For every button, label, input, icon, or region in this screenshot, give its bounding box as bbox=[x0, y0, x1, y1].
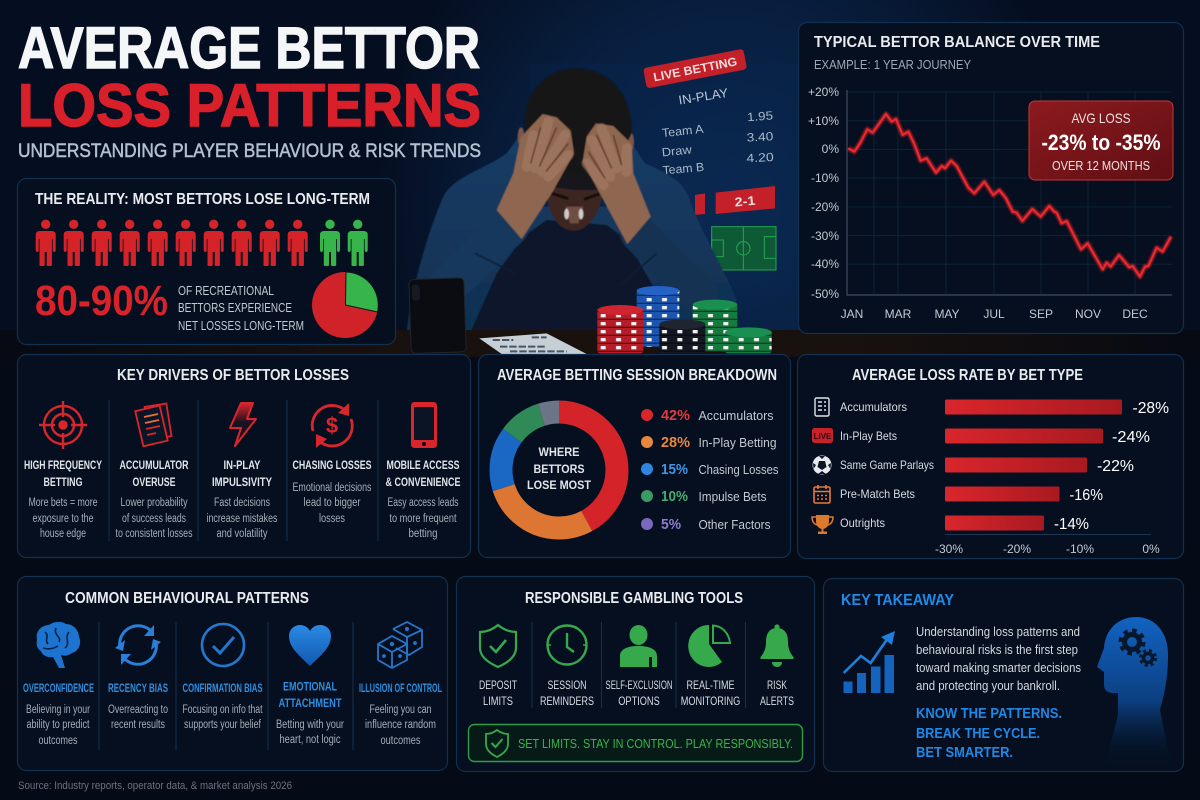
pattern: recency bias: Overreacting to bbox=[108, 704, 168, 716]
betting screen bbox=[530, 49, 800, 297]
bar axis: 0% bbox=[1142, 542, 1160, 556]
pattern: illusion of control bbox=[359, 622, 442, 747]
tool: deposit limits bbox=[479, 625, 517, 708]
icon: live badge bbox=[812, 428, 833, 443]
pattern: recency bias: recent results bbox=[111, 719, 165, 731]
bet slip bbox=[479, 333, 587, 354]
stat description bbox=[178, 283, 304, 333]
banner: play responsibly: SET LIMITS. STAY IN CONTROL. PLAY RESPONSIBLY. bbox=[518, 736, 793, 751]
banner: play responsibly bbox=[468, 724, 802, 762]
legend: 28% bbox=[661, 434, 690, 451]
icon: bet slip bbox=[815, 398, 829, 416]
icon: lightning bolt bbox=[230, 403, 256, 446]
legend: 5% bbox=[661, 516, 681, 533]
line chart: -40% bbox=[811, 257, 839, 271]
driver: in-play impulsivity: increase mistakes bbox=[206, 513, 278, 525]
tool: session reminders bbox=[540, 626, 594, 708]
driver: chasing losses: CHASING LOSSES bbox=[292, 458, 372, 472]
icon: rising chart bbox=[844, 631, 895, 693]
title: LOSS PATTERNS bbox=[18, 72, 481, 139]
driver: chasing losses bbox=[292, 403, 372, 525]
row: accumulators: Accumulators bbox=[840, 400, 907, 414]
line chart: MAY bbox=[934, 307, 960, 321]
legend: 10% bbox=[661, 488, 688, 505]
line chart: -10% bbox=[811, 171, 839, 185]
driver: high frequency betting: HIGH FREQUENCY bbox=[24, 458, 102, 472]
row: accumulators bbox=[815, 398, 1169, 417]
tool: real-time monitoring: MONITORING bbox=[681, 694, 740, 708]
betting screen: 3.40 bbox=[746, 129, 774, 145]
driver: high frequency betting: More bets = more bbox=[28, 497, 98, 509]
pattern: emotional attachment: ATTACHMENT bbox=[278, 696, 342, 710]
betting screen: Team A bbox=[661, 122, 704, 140]
driver: in-play impulsivity: Fast decisions bbox=[214, 497, 270, 509]
legend: Other Factors bbox=[698, 517, 771, 532]
heading: behavioural patterns: COMMON BEHAVIOURAL PATTERNS bbox=[65, 590, 309, 607]
line chart: +20% bbox=[808, 85, 839, 99]
pattern: emotional attachment: EMOTIONAL bbox=[283, 680, 337, 694]
line chart bbox=[808, 85, 1172, 321]
tool: real-time monitoring bbox=[681, 625, 740, 708]
driver: in-play impulsivity bbox=[206, 403, 278, 540]
people pictogram: 10 red, 2 green bbox=[36, 220, 368, 266]
table bbox=[0, 330, 1200, 357]
row: pre-match bets: Pre-Match Bets bbox=[840, 487, 915, 501]
panel: key drivers bbox=[18, 354, 470, 558]
pattern: illusion of control: outcomes bbox=[380, 735, 421, 747]
pattern: overconfidence: ability to predict bbox=[26, 719, 90, 731]
row: pre-match bets: -16% bbox=[1070, 487, 1103, 504]
tool: real-time monitoring: REAL-TIME bbox=[686, 678, 734, 692]
legend: In-Play Betting bbox=[698, 435, 776, 450]
left hand bbox=[497, 114, 574, 239]
pattern: recency bias bbox=[108, 625, 168, 731]
panel: the reality bbox=[18, 178, 396, 344]
row: outrights: -14% bbox=[1054, 516, 1089, 533]
row: same game parlays: -22% bbox=[1097, 458, 1134, 475]
driver: accumulator overuse: ACCUMULATOR bbox=[120, 458, 189, 472]
tool: self-exclusion: OPTIONS bbox=[618, 694, 660, 708]
icon: football bbox=[812, 456, 832, 474]
hero illustration: stressed bettor at table bbox=[0, 0, 1200, 357]
panel: loss rate by bet type bbox=[798, 354, 1184, 558]
legend: 15% bbox=[661, 461, 688, 478]
line chart: 0% bbox=[822, 142, 839, 156]
tool: risk alerts: ALERTS bbox=[760, 694, 794, 708]
phone bbox=[409, 278, 466, 354]
pattern: emotional attachment: heart, not logic bbox=[280, 734, 341, 746]
heading: balance over time: EXAMPLE: 1 YEAR JOURNEY bbox=[814, 57, 971, 72]
legend bbox=[641, 407, 779, 533]
callout: average loss: OVER 12 MONTHS bbox=[1052, 158, 1150, 173]
line chart: SEP bbox=[1029, 307, 1053, 321]
row: in-play bets: In-Play Bets bbox=[840, 429, 897, 443]
icon: trophy bbox=[812, 515, 833, 534]
tool: deposit limits: DEPOSIT bbox=[479, 678, 517, 692]
pattern: confirmation bias bbox=[182, 624, 263, 731]
legend: Chasing Losses bbox=[698, 462, 779, 477]
icon: head with gears bbox=[1097, 617, 1172, 770]
pattern: overconfidence bbox=[23, 622, 94, 747]
icon: check circle bbox=[202, 624, 244, 666]
row: outrights bbox=[812, 515, 1089, 534]
pattern: overconfidence: Believing in your bbox=[26, 704, 90, 716]
row: in-play bets bbox=[812, 428, 1150, 446]
heading: loss rate: AVERAGE LOSS RATE BY BET TYPE bbox=[852, 367, 1083, 384]
pattern: overconfidence: OVERCONFIDENCE bbox=[23, 681, 94, 695]
driver: chasing losses: lead to bigger bbox=[304, 497, 361, 509]
bar axis: -30% bbox=[935, 542, 963, 556]
stat description: OF RECREATIONAL bbox=[178, 283, 274, 298]
title bbox=[18, 16, 481, 162]
heading: responsible gambling tools: RESPONSIBLE GAMBLING TOOLS bbox=[525, 590, 743, 607]
icon: clock bbox=[547, 626, 587, 664]
takeaway text: Understanding loss patterns and bbox=[916, 625, 1080, 639]
driver: mobile access: betting bbox=[408, 528, 438, 540]
line chart: JUL bbox=[983, 307, 1005, 321]
callout: average loss: -23% to -35% bbox=[1042, 130, 1160, 155]
pattern: illusion of control: Feeling you can bbox=[370, 704, 432, 716]
man bbox=[407, 68, 737, 333]
driver: mobile access: & CONVENIENCE bbox=[386, 475, 460, 489]
pattern: illusion of control: influence random bbox=[365, 719, 436, 731]
takeaway text: toward making smarter decisions bbox=[916, 661, 1081, 675]
call to action: KNOW THE PATTERNS. bbox=[916, 705, 1062, 722]
icon: phone bbox=[411, 402, 437, 448]
stat description: BETTORS EXPERIENCE bbox=[178, 300, 292, 315]
title: AVERAGE BETTOR bbox=[18, 16, 480, 81]
call to action bbox=[916, 705, 1062, 761]
pattern: emotional attachment bbox=[276, 625, 344, 746]
driver: accumulator overuse: Lower probability bbox=[120, 497, 188, 509]
driver: mobile access: MOBILE ACCESS bbox=[386, 458, 460, 472]
icon: pie chart bbox=[688, 625, 730, 667]
icon: heart bbox=[289, 625, 331, 666]
icon: brain bbox=[37, 622, 80, 668]
driver: accumulator overuse bbox=[116, 403, 193, 540]
source note: Source: Industry reports, operator data, & market analysis 2026 bbox=[18, 780, 292, 792]
betting screen: Draw bbox=[661, 142, 693, 160]
takeaway text bbox=[916, 625, 1081, 693]
row: same game parlays bbox=[812, 456, 1134, 475]
tool: session reminders: SESSION bbox=[548, 678, 586, 692]
legend: Impulse Bets bbox=[698, 489, 767, 504]
pattern: confirmation bias: supports your belief bbox=[184, 719, 262, 731]
driver: in-play impulsivity: IN-PLAY bbox=[224, 458, 260, 472]
row: accumulators: -28% bbox=[1132, 400, 1169, 417]
line chart: -30% bbox=[811, 229, 839, 243]
driver: high frequency betting: exposure to the bbox=[32, 513, 94, 525]
driver: accumulator overuse: of success leads bbox=[122, 513, 186, 525]
driver: in-play impulsivity: IMPULSIVITY bbox=[212, 475, 272, 489]
icon: person bbox=[620, 625, 657, 667]
betting screen: Team B bbox=[662, 160, 705, 177]
heading: key drivers: KEY DRIVERS OF BETTOR LOSSES bbox=[117, 367, 349, 384]
call to action: BREAK THE CYCLE. bbox=[916, 725, 1040, 742]
driver: accumulator overuse: OVERUSE bbox=[132, 475, 176, 489]
driver: mobile access: to more frequent bbox=[390, 513, 457, 525]
call to action: BET SMARTER. bbox=[916, 744, 1013, 761]
right hand bbox=[583, 123, 651, 244]
legend: Accumulators bbox=[698, 408, 774, 423]
icon: live badge: LIVE bbox=[814, 432, 832, 441]
pattern: emotional attachment: Betting with your bbox=[276, 719, 344, 731]
pattern: recency bias: RECENCY BIAS bbox=[108, 681, 168, 695]
panel: key takeaway bbox=[824, 578, 1184, 772]
tool: deposit limits: LIMITS bbox=[483, 694, 513, 708]
donut chart: LOSE MOST bbox=[527, 478, 592, 492]
heading: balance over time: TYPICAL BETTOR BALANCE OVER TIME bbox=[814, 34, 1100, 51]
donut chart: BETTORS bbox=[534, 462, 584, 476]
driver: in-play impulsivity: and volatility bbox=[216, 528, 268, 540]
line chart: +10% bbox=[808, 114, 839, 128]
heading: session breakdown: AVERAGE BETTING SESSION BREAKDOWN bbox=[497, 367, 777, 384]
icon: betting slips bbox=[135, 403, 172, 446]
row: pre-match bets bbox=[814, 485, 1103, 504]
driver: mobile access: Easy access leads bbox=[388, 497, 459, 509]
pie chart bbox=[312, 272, 378, 338]
tool: risk alerts: RISK bbox=[767, 678, 787, 692]
tool: self-exclusion bbox=[606, 625, 672, 708]
legend: 42% bbox=[661, 407, 690, 424]
icon: dollar cycle: $ bbox=[326, 413, 338, 438]
betting screen: IN-PLAY bbox=[678, 86, 730, 107]
line chart: NOV bbox=[1075, 307, 1101, 321]
takeaway text: behavioural risks is the first step bbox=[916, 643, 1078, 657]
driver: high frequency betting: BETTING bbox=[44, 475, 82, 489]
betting screen: 1.95 bbox=[747, 108, 774, 124]
takeaway text: and protecting your bankroll. bbox=[916, 679, 1060, 693]
tool: risk alerts bbox=[760, 624, 794, 708]
icon: target bbox=[39, 401, 87, 449]
icon: bell bbox=[760, 624, 794, 667]
driver: high frequency betting: house edge bbox=[40, 528, 86, 540]
callout: average loss bbox=[1029, 101, 1173, 180]
line chart: MAR bbox=[885, 307, 912, 321]
betting screen: 2-1 bbox=[734, 194, 756, 210]
row: outrights: Outrights bbox=[840, 516, 885, 530]
driver: chasing losses: Emotional decisions bbox=[292, 482, 372, 494]
tool: self-exclusion: SELF-EXCLUSION bbox=[606, 678, 672, 692]
callout: average loss: AVG LOSS bbox=[1072, 110, 1130, 126]
bar axis bbox=[935, 534, 1160, 556]
line chart: -50% bbox=[811, 287, 839, 301]
poker chips bbox=[597, 286, 772, 353]
stat description: NET LOSSES LONG-TERM bbox=[178, 318, 304, 333]
driver: mobile access bbox=[386, 402, 460, 540]
line chart: JAN bbox=[841, 307, 863, 321]
driver: high frequency betting bbox=[24, 401, 102, 540]
pattern: illusion of control: ILLUSION OF CONTROL bbox=[359, 681, 442, 695]
pattern: confirmation bias: Focusing on info that bbox=[182, 704, 263, 716]
pattern: confirmation bias: CONFIRMATION BIAS bbox=[182, 681, 262, 695]
icon: calendar bbox=[814, 485, 830, 503]
driver: accumulator overuse: to consistent losses bbox=[116, 528, 193, 540]
row: in-play bets: -24% bbox=[1112, 429, 1150, 446]
icon: cycle arrows bbox=[115, 625, 161, 665]
line chart: -20% bbox=[811, 200, 839, 214]
icon: dice bbox=[378, 622, 422, 668]
heading: balance over time bbox=[814, 34, 1100, 72]
donut chart bbox=[501, 412, 617, 528]
title: UNDERSTANDING PLAYER BEHAVIOUR & RISK TRENDS bbox=[18, 141, 481, 162]
heading: key takeaway: KEY TAKEAWAY bbox=[841, 592, 954, 609]
icon: small shield bbox=[486, 730, 508, 757]
tool: session reminders: REMINDERS bbox=[540, 694, 594, 708]
bar axis: -20% bbox=[1003, 542, 1031, 556]
bar axis: -10% bbox=[1066, 542, 1094, 556]
heading: the reality: THE REALITY: MOST BETTORS LOSE LONG-TERM bbox=[35, 191, 370, 208]
panel: bettor balance chart bbox=[798, 22, 1184, 334]
panel: behavioural patterns bbox=[18, 576, 448, 770]
pattern: overconfidence: outcomes bbox=[38, 735, 78, 747]
panel: session breakdown bbox=[478, 354, 790, 558]
betting screen: LIVE BETTING bbox=[652, 54, 738, 84]
donut chart: WHERE bbox=[538, 445, 580, 459]
stat: 80-90%: 80-90% bbox=[35, 277, 168, 325]
icon: shield bbox=[480, 625, 516, 667]
row: same game parlays: Same Game Parlays bbox=[840, 458, 934, 472]
betting screen: 4.20 bbox=[746, 150, 774, 165]
driver: chasing losses: losses bbox=[319, 513, 345, 525]
line chart: DEC bbox=[1122, 307, 1148, 321]
panel: responsible gambling tools bbox=[456, 576, 814, 772]
